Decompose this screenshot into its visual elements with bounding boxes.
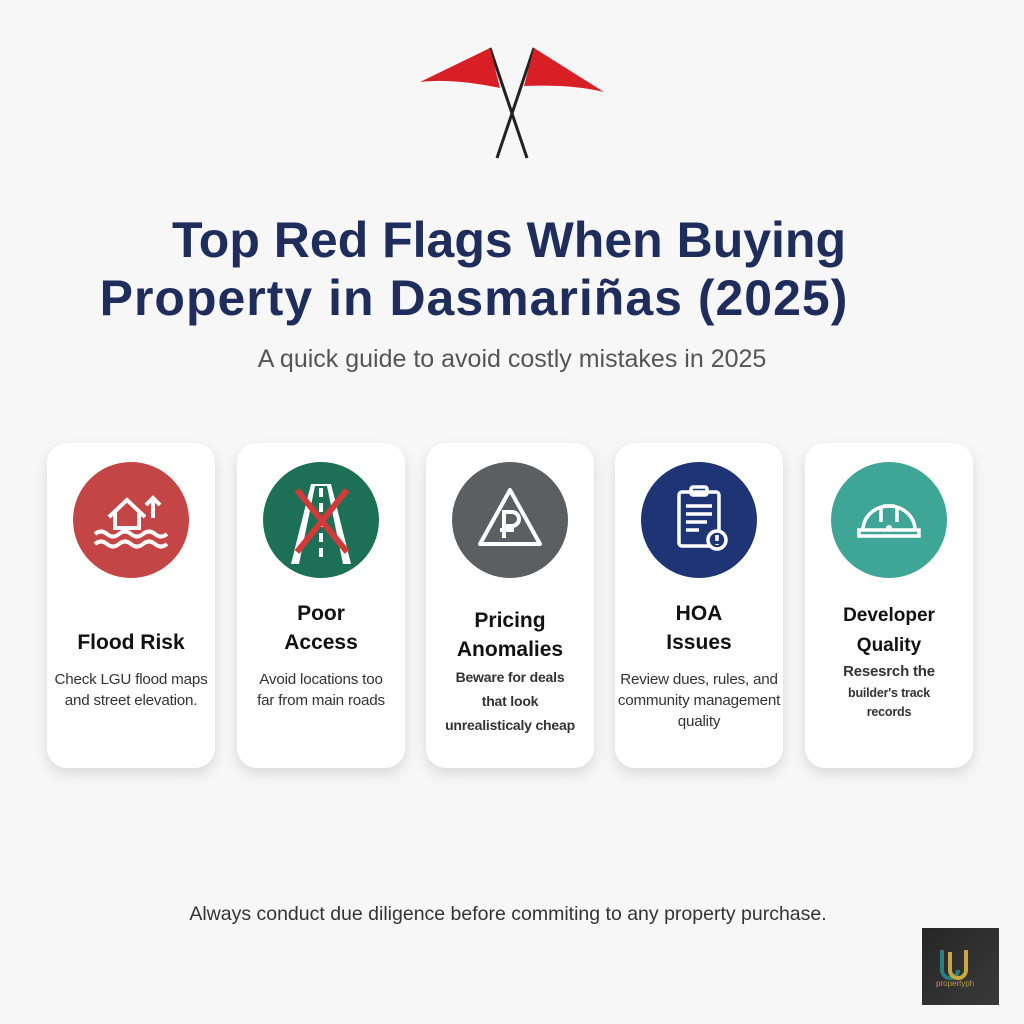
icon: hard hat bbox=[831, 462, 947, 578]
panel: flood risk: Check LGU flood maps bbox=[54, 671, 208, 688]
panel: flood risk bbox=[47, 443, 215, 768]
icon: crossed red flags bbox=[420, 48, 604, 158]
subtitle: A quick guide to avoid costly mistakes in 2025 bbox=[258, 345, 766, 373]
title: Property in Dasmariñas (2025) bbox=[100, 270, 848, 326]
logo: propertyph bbox=[936, 979, 974, 988]
footer note: Always conduct due diligence before commiting to any property purchase. bbox=[189, 903, 827, 925]
panel: pricing anomalies bbox=[426, 443, 594, 768]
panel: HOA issues bbox=[615, 443, 783, 768]
icon: clipboard warning bbox=[641, 462, 757, 578]
panel: HOA issues: Review dues, rules, and bbox=[620, 671, 778, 688]
panel: pricing anomalies: unrealisticaly cheap bbox=[445, 717, 575, 733]
panel: poor access: Access bbox=[284, 631, 358, 654]
panel: pricing anomalies: Pricing bbox=[474, 609, 546, 632]
panel: HOA issues: quality bbox=[678, 713, 720, 730]
panel: developer quality: builder's track bbox=[848, 686, 930, 700]
panel: poor access: Avoid locations too bbox=[259, 671, 383, 688]
panel: HOA issues: community management bbox=[618, 692, 780, 709]
panel: HOA issues: Issues bbox=[666, 631, 732, 654]
panel: developer quality: Resesrch the bbox=[843, 663, 935, 680]
panel: pricing anomalies: Beware for deals bbox=[456, 669, 564, 685]
icon: peso warning triangle bbox=[452, 462, 568, 578]
panel: pricing anomalies: Anomalies bbox=[457, 638, 563, 661]
panel: poor access: far from main roads bbox=[257, 692, 385, 709]
panel: developer quality: Quality bbox=[857, 635, 921, 656]
panel: developer quality: records bbox=[867, 705, 911, 719]
logo bbox=[922, 928, 999, 1005]
panel: HOA issues: HOA bbox=[676, 602, 722, 625]
panel: flood risk: and street elevation. bbox=[65, 692, 197, 709]
title bbox=[100, 212, 848, 326]
panel: poor access: Poor bbox=[297, 602, 345, 625]
title: Top Red Flags When Buying bbox=[172, 212, 846, 268]
panel: pricing anomalies: that look bbox=[482, 693, 538, 709]
panel: flood risk: Flood Risk bbox=[77, 631, 185, 654]
panel: developer quality: Developer bbox=[843, 605, 935, 626]
panel: developer quality bbox=[805, 443, 973, 768]
panel: poor access bbox=[237, 443, 405, 768]
icon: flooded house bbox=[73, 462, 189, 578]
icon: road with X bbox=[263, 462, 379, 578]
